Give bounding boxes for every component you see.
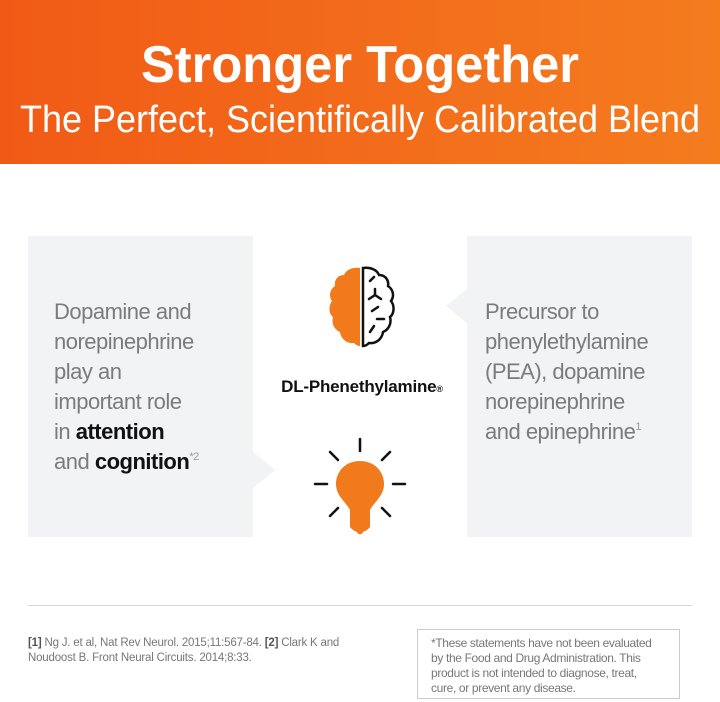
panel: left: [28, 236, 253, 537]
disclaimer box: cure, or prevent any disease.: [431, 681, 576, 695]
right text: phenylethylamine: [485, 329, 648, 354]
footnote references: Noudoost B. Front Neural Circuits. 2014;8:33.: [28, 652, 252, 664]
footnote references: [28, 637, 339, 664]
icon: light bulb: [314, 438, 406, 534]
left text: norepinephrine: [54, 329, 194, 354]
right text: and epinephrine1: [485, 419, 641, 444]
left text: in attention: [54, 419, 164, 444]
divider: [28, 605, 692, 606]
left text: Dopamine and: [54, 299, 191, 324]
disclaimer box: by the Food and Drug Administration. This: [431, 651, 641, 665]
right text: (PEA), dopamine: [485, 359, 645, 384]
arrow: right panel pointer: [446, 289, 467, 323]
title: Stronger Together: [141, 36, 579, 94]
arrow: left panel pointer: [253, 452, 274, 488]
disclaimer box: product is not intended to diagnose, treat,: [431, 666, 637, 680]
disclaimer box: [417, 629, 680, 699]
left text: play an: [54, 359, 121, 384]
icon: brain: [329, 266, 395, 348]
left text: and cognition*2: [54, 449, 199, 474]
subtitle: The Perfect, Scientifically Calibrated Blend: [20, 99, 700, 141]
right text: Precursor to: [485, 299, 599, 324]
left text: important role: [54, 389, 182, 414]
disclaimer box: *These statements have not been evaluated: [431, 636, 651, 650]
right text: norepinephrine: [485, 389, 625, 414]
footnote references: [1] Ng J. et al, Nat Rev Neurol. 2015;11:567-84. [2] Clark K and: [28, 637, 339, 649]
left text: [54, 299, 199, 474]
panel: right: [467, 236, 692, 537]
header banner: [0, 0, 720, 164]
right text: [485, 299, 648, 444]
label: DL-Phenethylamine: DL-Phenethylamine®: [281, 377, 443, 396]
